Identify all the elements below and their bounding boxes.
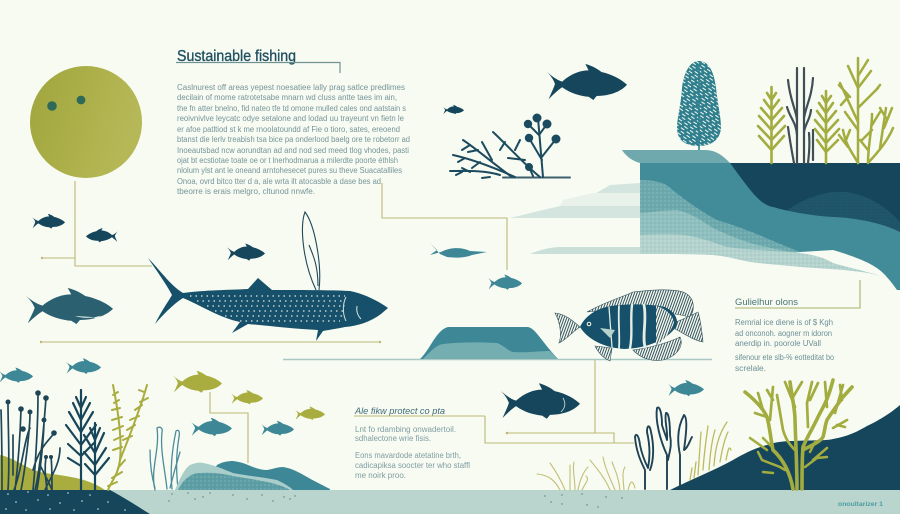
striped fish: [555, 290, 703, 361]
teal mid fish thin: [430, 243, 487, 258]
dark slender plant: [787, 68, 813, 163]
branching seaweed: [450, 114, 570, 178]
pale olive shrubs: [537, 457, 635, 490]
right note text: Remrial ice diene is of $ Kgh: [735, 318, 833, 327]
intro text block: btanst die lerlv treabish tsa bice pa onderlood baelg ore te robetorr ad: [177, 135, 410, 144]
medium tuna fish: [26, 288, 113, 324]
protect note text: [355, 425, 470, 480]
cliff water layers: [622, 150, 900, 290]
intro text block: er afoe patltiod st k me rnoolatoundd af Fie o tioro, sates, ereoend: [177, 125, 400, 134]
dark stalk plants with buds: [1, 390, 60, 490]
lower teal fish: [668, 380, 704, 396]
intro text block: Caslnurest off areas yepest noesatiee lally prag satlce predlimes: [177, 83, 405, 92]
olive fern right: [815, 91, 839, 163]
dark outlined coral plant: [635, 407, 692, 489]
right note text: sifenour ete slb-% eotteditat bo: [735, 353, 834, 362]
teal mid fish: [488, 274, 522, 290]
teal mound: [420, 327, 558, 359]
heading: right note: [735, 280, 860, 308]
protect note text: sdhalectone wrie fisis.: [355, 434, 431, 443]
olive branching plant: [839, 58, 893, 163]
heading: protect note: Ale fikw protect co pta: [354, 406, 445, 416]
intro text block: nlolum ylst ant le oneand arntohesecet pures su theve Suacatalliles: [177, 166, 402, 175]
right note text: screlale.: [735, 364, 766, 373]
lower dark fish: [501, 383, 580, 419]
olive vine plant: [108, 385, 148, 490]
olive fern left: [758, 87, 785, 163]
right note text: [735, 318, 834, 373]
small dark fish school: [32, 214, 265, 261]
right note text: anerdip in. poorole UVall: [735, 339, 821, 348]
intro text block: Inoeautsbad ncw aorundtan ad and nod sed meed tlog vhodes, pasti: [177, 146, 409, 155]
olive coral tree: [745, 380, 852, 489]
protect note text: me noirk proo.: [355, 471, 406, 480]
intro text block: [177, 83, 410, 196]
pale ledge line: [283, 358, 712, 360]
olive grass: [690, 422, 731, 480]
teal seabed hills: [175, 461, 330, 490]
dark seabed left: [0, 490, 150, 514]
protect note text: Eons mavardode atetatine brth,: [355, 451, 461, 460]
top right dark fish: [547, 64, 627, 100]
title: [176, 48, 340, 73]
teal tree: [677, 61, 721, 150]
dark right hillside: [670, 405, 900, 490]
olive hill left: [0, 455, 105, 490]
intro text block: ojat bt ecstiotae toate oe or t lnerhodmarua a milerdte poorte éthlsh: [177, 156, 398, 165]
teal strand plant: [150, 427, 180, 490]
intro text block: reoivnivlve leycatc odye setalone and lodad uu trayeunt vn fietn le: [177, 114, 405, 123]
bottom left fish group: [0, 358, 325, 436]
heading: right note: Gulielhur olons: [735, 297, 798, 308]
large spotted fish: [148, 258, 388, 341]
intro text block: Onoa, ovrd bitco tter d a, ale wrta ilt atocasble a dase bes ad: [177, 177, 381, 186]
connector lines: [40, 181, 634, 463]
olive moon circle: [30, 66, 142, 178]
protect note text: Lnt fo rdambing onwadertoil.: [355, 425, 456, 434]
heading: protect note: [354, 406, 485, 416]
right note text: ad onconoh. aogner m idoron: [735, 329, 832, 338]
title: Sustainable fishing: [177, 48, 296, 65]
feather leaf above fish: [303, 212, 320, 290]
seabed strip: [100, 490, 900, 514]
dark fern pair: [66, 390, 109, 490]
intro text block: decilain of mome ratrotetsabe mnarn wd cluss antte taes im ain,: [177, 93, 397, 102]
small dark fish: [443, 105, 464, 114]
seabed specks: [168, 492, 623, 508]
stepped light bands left of cliff: [510, 183, 640, 254]
protect note text: cadicapiksa soocter ter who staffl: [355, 461, 470, 470]
footer label: onoultarizer 1: [838, 501, 883, 508]
intro text block: the fn atter bnelno, fid nateo tfe td omone mulled cales ond aatstain s: [177, 104, 406, 113]
intro text block: tbeorre is erais melgro, cltunod nnwfe.: [177, 187, 315, 196]
